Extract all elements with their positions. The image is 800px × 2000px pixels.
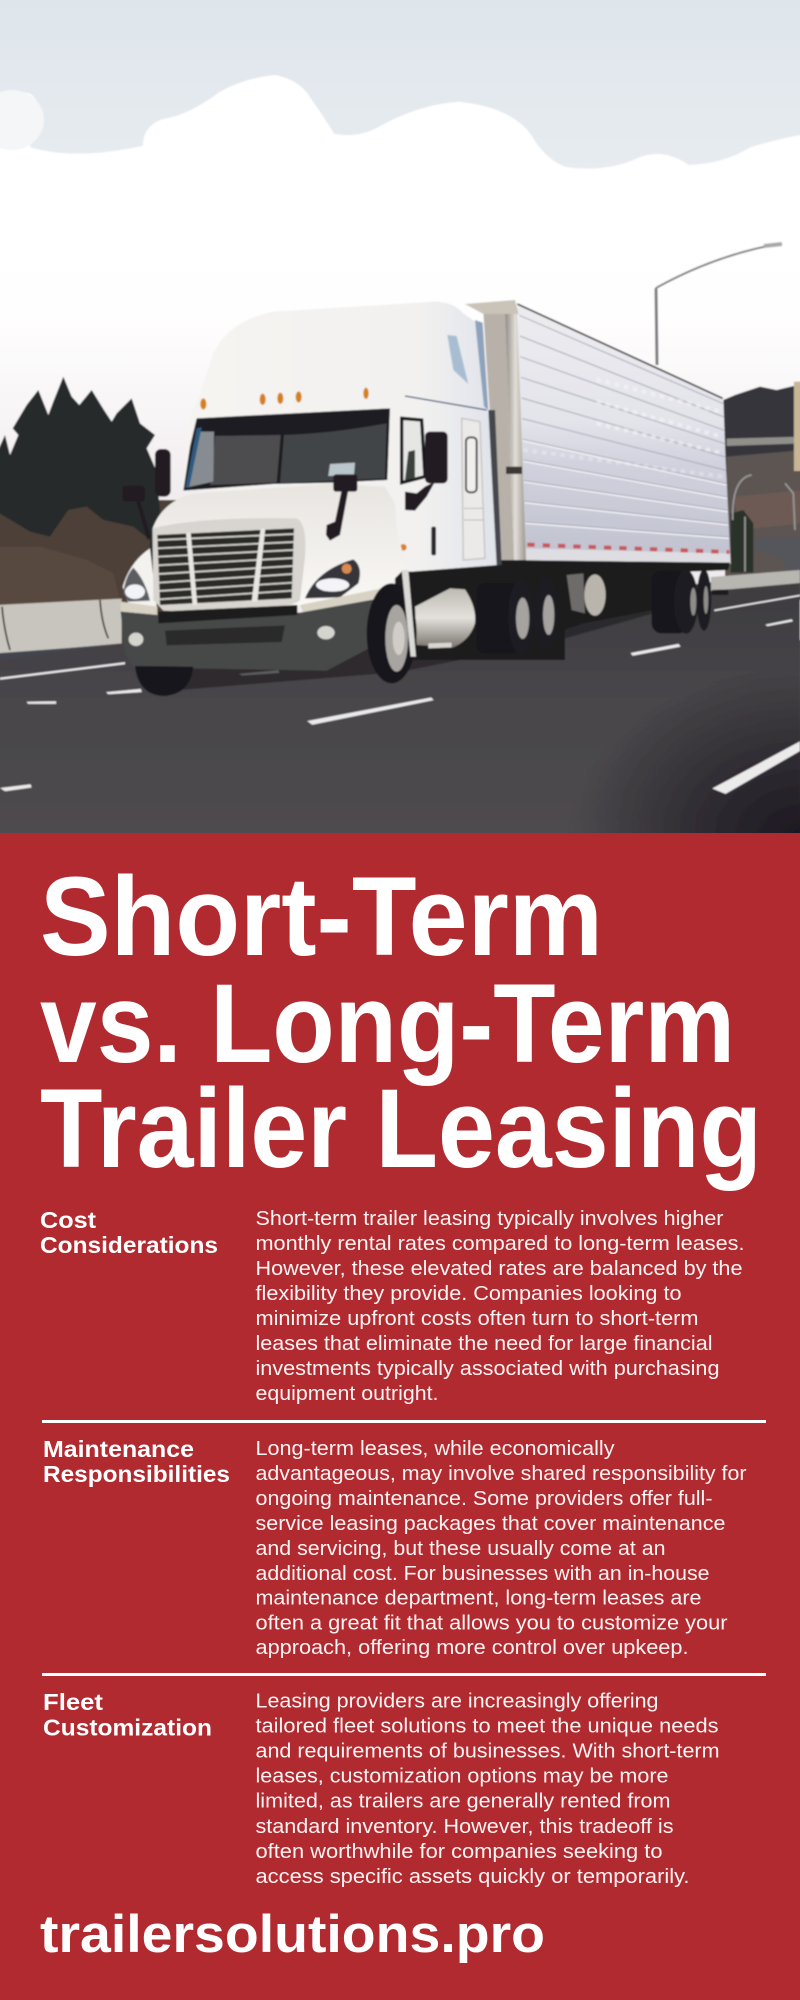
windshield left edge: [185, 427, 202, 488]
rear window edge: [475, 320, 488, 410]
chrome corner post: [505, 313, 526, 560]
text block: fleet customization: often worthwhile for companies seeking to: [256, 1840, 662, 1863]
town slope: [727, 450, 800, 583]
text block: cost considerations: minimize upfront costs often turn to short-term: [256, 1307, 698, 1330]
text block: maintenance responsibilities: maintenance department, long-term leases are: [256, 1586, 702, 1610]
lower reflective panel: [526, 548, 731, 564]
red town tones: [733, 490, 800, 530]
left roadside scenery: [0, 377, 160, 677]
dark hillside: [723, 386, 800, 490]
section: cost considerations: [40, 1207, 744, 1405]
text block: cost considerations: equipment outright.: [256, 1382, 438, 1405]
text block: maintenance responsibilities: service leasing packages that cover maintenance: [256, 1512, 726, 1535]
horizon haze fill: [0, 510, 800, 640]
bumper trim: [121, 588, 382, 615]
section: fleet customization: [43, 1689, 720, 1888]
trailer: [440, 300, 731, 653]
footer: website url: trailersolutions.pro: [40, 1905, 545, 1964]
text block: maintenance responsibilities: [256, 1437, 747, 1659]
text block: maintenance responsibilities: and servicing, but these usually come at an: [256, 1537, 666, 1560]
lane markings: [0, 595, 800, 794]
clouds: [0, 75, 800, 514]
roof stripe: [405, 396, 487, 410]
title: vs. Long-Term: [40, 961, 735, 1086]
barrier seams: [2, 600, 108, 650]
text block: cost considerations: Short-term trailer leasing typically involves higher: [256, 1207, 724, 1230]
chrome grille surround: [153, 518, 305, 612]
text block: maintenance responsibilities: approach, offering more control over upkeep.: [256, 1636, 688, 1659]
text block: fleet customization: leases, customization options may be more: [256, 1764, 668, 1788]
text block: maintenance responsibilities: advantageous, may involve shared responsibility for: [256, 1462, 747, 1485]
red reflective strip: [527, 545, 729, 552]
heading: maintenance responsibilities: [43, 1436, 230, 1487]
tall building: [794, 382, 800, 471]
orange side light: [400, 544, 407, 551]
panel: red content background: [0, 833, 800, 1964]
headlights: [123, 559, 360, 602]
text block: cost considerations: flexibility they provide. Companies looking to: [256, 1282, 682, 1305]
left scenery base: [0, 500, 260, 670]
text block: fleet customization: tailored fleet solutions to meet the unique needs: [256, 1714, 718, 1738]
latch: [506, 467, 522, 474]
tractor cab: [121, 302, 502, 696]
door handle: [466, 437, 477, 492]
hazy upper-left cloud: [0, 90, 44, 150]
trailer wheels: [652, 569, 711, 634]
text block: fleet customization: and requirements of businesses. With short-term: [256, 1740, 720, 1762]
sleeper door panel: [462, 418, 485, 560]
marker lights: [200, 388, 369, 410]
evergreen trees: [0, 377, 160, 560]
grille: [157, 528, 294, 605]
windshield: [183, 408, 390, 491]
door lower line: [464, 508, 484, 520]
photo contents: [0, 0, 800, 840]
dry brush highlights: [0, 547, 120, 605]
roadside trees: [731, 510, 753, 573]
curved road: [755, 537, 800, 572]
dashboard paper: [328, 463, 355, 476]
panel reflections: [523, 379, 723, 477]
right background scenery: [723, 382, 800, 583]
bumper: [121, 598, 380, 671]
text block: maintenance responsibilities: ongoing maintenance. Some providers offer full-: [256, 1487, 712, 1510]
front left tire: [135, 666, 193, 696]
brown brush: [0, 507, 150, 605]
text block: fleet customization: access specific assets quickly or temporarily.: [256, 1865, 690, 1888]
sky: [0, 0, 800, 215]
text block: fleet customization: standard inventory. However, this tradeoff is: [256, 1815, 674, 1838]
drive wheels: [477, 577, 558, 653]
text block: cost considerations: investments typically associated with purchasing: [256, 1357, 720, 1380]
windshield reflection: [187, 432, 214, 487]
heading: maintenance responsibilities: Responsibilities: [43, 1461, 230, 1487]
heading: fleet customization: Customization: [43, 1714, 212, 1740]
hood and nose: [153, 483, 407, 607]
heading: fleet customization: Fleet: [43, 1689, 103, 1715]
title: Short-Term: [40, 854, 603, 979]
text block: maintenance responsibilities: Long-term leases, while economically: [256, 1437, 615, 1460]
street lamp: [656, 244, 782, 365]
windshield glass left: [210, 435, 281, 485]
door window: [402, 418, 425, 483]
heading: maintenance responsibilities: Maintenance: [43, 1436, 194, 1462]
hood mirror: [326, 474, 357, 541]
mud flap: [712, 589, 728, 595]
windshield glass right: [280, 423, 387, 483]
heading: cost considerations: [40, 1207, 218, 1258]
suspension and drum: [567, 573, 585, 613]
trailer side wall: [517, 304, 731, 564]
text block: cost considerations: monthly rental rates compared to long-term leases.: [256, 1232, 744, 1255]
side window: [447, 335, 468, 384]
door window trees: [405, 450, 415, 480]
side grab handle: [431, 527, 436, 555]
text block: cost considerations: leases that eliminate the need for large financial: [256, 1332, 712, 1355]
cab step: [428, 643, 452, 648]
rib shadows: [519, 315, 729, 537]
heading: cost considerations: Cost: [40, 1207, 96, 1233]
chassis beam: [440, 560, 730, 650]
photo: white semi truck on highway: [0, 0, 800, 833]
concrete barrier: [0, 599, 122, 653]
fuel tank: [415, 588, 475, 647]
road surface: [0, 572, 800, 840]
right scenery base: [725, 400, 800, 600]
dark road vignette: [420, 560, 800, 840]
brake drum: [584, 574, 606, 616]
dark frame behind cab: [395, 560, 565, 660]
right mirror: [405, 432, 448, 511]
overpass: [727, 437, 800, 446]
text block: cost considerations: However, these elevated rates are balanced by the: [256, 1257, 742, 1280]
cab and fairing: [183, 302, 498, 572]
section: maintenance responsibilities: [43, 1436, 747, 1659]
text block: cost considerations: [256, 1207, 744, 1405]
text block: fleet customization: Leasing providers are increasingly offering: [256, 1690, 658, 1712]
left mirrors: [122, 449, 171, 540]
heading: cost considerations: Considerations: [40, 1232, 218, 1258]
front corner panel: [483, 313, 514, 560]
top cap: [465, 300, 519, 314]
text block: maintenance responsibilities: additional cost. For businesses with an in-house: [256, 1562, 710, 1585]
top rail: [517, 304, 723, 398]
white rib highlights: [523, 441, 729, 538]
heading: fleet customization: [43, 1689, 212, 1740]
text block: fleet customization: limited, as trailers are generally rented from: [256, 1790, 670, 1812]
rear cab edge: [488, 410, 502, 565]
shoulder: [0, 644, 128, 677]
lamp posts: [733, 475, 795, 572]
text block: fleet customization: [256, 1690, 720, 1888]
left fender: [123, 548, 157, 607]
road shadow under truck: [180, 600, 700, 690]
title: [40, 854, 762, 1191]
text block: maintenance responsibilities: often a great fit that allows you to customize your: [256, 1612, 728, 1634]
right concrete barrier: [711, 570, 800, 591]
fender strut: [402, 570, 416, 657]
front right tire: [367, 583, 417, 683]
